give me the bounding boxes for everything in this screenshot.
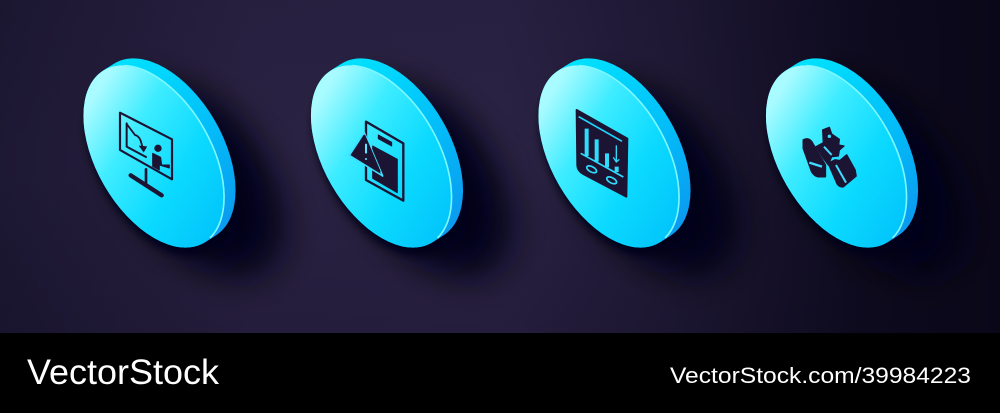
icon: falling bar chart panel — [577, 110, 627, 197]
disc 2: tablet with warning sign — [282, 34, 541, 302]
footer band — [0, 333, 1000, 413]
icon: presentation board — [120, 113, 172, 195]
image id: VectorStock.com/39984223 — [670, 363, 971, 388]
disc 3: stock chart panel — [509, 34, 769, 302]
icon: broken pieces — [803, 127, 856, 187]
disc 1: presentation board with falling chart — [54, 34, 314, 302]
disc 4: broken bandage — [737, 34, 996, 302]
icon: tablet warning — [349, 122, 403, 201]
logo: VectorStock: VectorStock — [27, 353, 220, 392]
